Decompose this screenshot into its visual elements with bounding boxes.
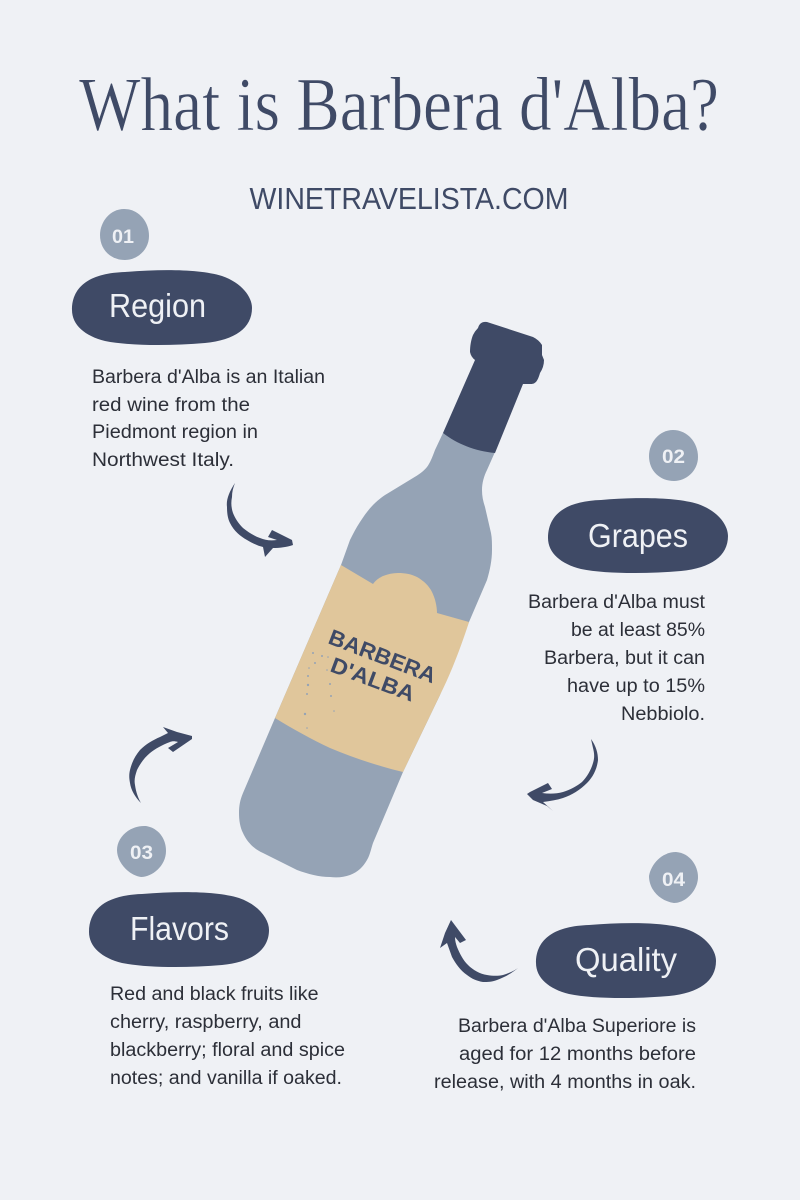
arrow: quality to grapes — [440, 920, 518, 982]
number badge 02 — [649, 430, 698, 481]
region description: Barbera d'Alba is an Italian — [92, 367, 325, 388]
panel: region — [72, 209, 325, 471]
grapes description: have up to 15% — [567, 676, 705, 697]
bottle label — [275, 565, 469, 772]
heading pill: Region: Region — [109, 287, 206, 324]
region description: Piedmont region in — [92, 422, 258, 443]
grapes description: be at least 85% — [571, 620, 705, 641]
website subtitle: WINETRAVELISTA.COM — [250, 181, 568, 216]
number badge 01: 01 — [112, 227, 134, 248]
heading pill: Grapes — [548, 498, 728, 573]
bottle body — [239, 433, 495, 877]
quality description: Barbera d'Alba Superiore is — [458, 1016, 696, 1037]
heading pill: Flavors — [89, 892, 269, 967]
number badge 01 — [100, 209, 149, 260]
heading pill: Region — [72, 270, 252, 345]
quality description — [434, 1016, 696, 1093]
grapes description: Nebbiolo. — [621, 704, 705, 725]
panel: flavors — [89, 826, 345, 1089]
number badge 02: 02 — [662, 447, 685, 468]
flavors description: cherry, raspberry, and — [110, 1012, 302, 1033]
flavors description: notes; and vanilla if oaked. — [110, 1068, 342, 1089]
grapes description: Barbera, but it can — [544, 648, 705, 669]
region description: Northwest Italy. — [92, 450, 234, 471]
quality description: aged for 12 months before — [459, 1044, 696, 1065]
region description: red wine from the — [92, 395, 250, 416]
grapes description — [528, 592, 706, 725]
arrow: region to bottle — [227, 483, 293, 557]
number badge 03: 03 — [130, 843, 153, 864]
arrow: flavors to bottle — [129, 727, 192, 803]
panel: quality — [434, 852, 716, 1093]
illustration: wine bottle — [239, 322, 544, 877]
label text: D'ALBA — [327, 652, 419, 707]
heading pill: Grapes: Grapes — [588, 517, 688, 554]
number badge 04 — [649, 852, 698, 903]
panel: grapes — [528, 430, 728, 725]
flavors description — [110, 984, 345, 1089]
quality description: release, with 4 months in oak. — [434, 1072, 696, 1093]
flavors description: Red and black fruits like — [110, 984, 318, 1005]
heading pill: Quality — [536, 923, 716, 998]
heading pill: Flavors: Flavors — [130, 910, 229, 947]
grapes description: Barbera d'Alba must — [528, 592, 706, 613]
flavors description: blackberry; floral and spice — [110, 1040, 345, 1061]
region description — [92, 367, 325, 471]
arrow: grapes to quality — [527, 739, 598, 811]
heading pill: Quality: Quality — [575, 941, 677, 978]
number badge 04: 04 — [662, 870, 685, 891]
bottle neck and cap — [443, 322, 544, 453]
label text: BARBERA — [325, 624, 440, 688]
number badge 03 — [117, 826, 166, 877]
